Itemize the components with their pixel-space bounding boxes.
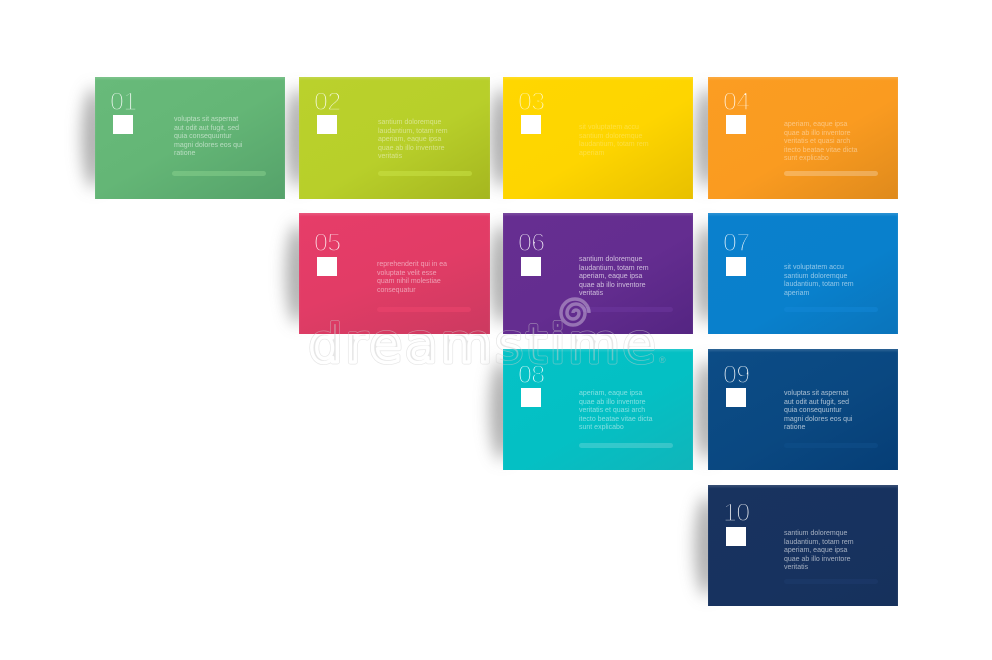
text block: quia consequuntur [174,133,232,140]
text block: quae ab illo inventore [784,130,851,137]
text block: laudantium, totam rem [784,281,854,288]
text block: quae ab illo inventore [579,282,646,289]
white square icon [726,388,746,407]
text block: voluptas sit aspernat [174,116,238,123]
text block: ratione [784,424,805,431]
text block: consequatur [377,287,416,294]
number 03: 03 [518,88,545,116]
white square icon [317,257,337,276]
text block [378,118,448,160]
progress bar [784,307,878,312]
watermark registered mark: ® [659,355,666,365]
progress bar [378,171,472,176]
progress bar [579,443,673,448]
white square icon [521,388,541,407]
text block: itecto beatae vitae dicta [579,416,653,423]
text block: santium doloremque [784,530,847,537]
text block [579,124,649,157]
text block [579,256,649,297]
number 07: 07 [723,229,750,257]
text block: aperiam, eaque ipsa [378,136,441,143]
number 05: 05 [314,229,341,257]
text block [174,116,242,157]
text block: aut odit aut fugit, sed [784,399,849,406]
text block: aperiam, eaque ipsa [784,547,847,554]
panel: card 08 teal [503,349,693,470]
watermark wordmark [310,320,655,365]
number 04: 04 [723,88,750,116]
text block: santium doloremque [378,119,441,126]
text block: laudantium, totam rem [378,128,448,135]
text block: santium doloremque [784,273,847,280]
text block: aperiam, eaque ipsa [579,390,642,397]
number 01: 01 [110,88,137,116]
progress bar [784,171,878,176]
panel: card 09 navy [708,349,898,470]
white square icon [317,115,337,134]
text block: laudantium, totam rem [579,141,649,148]
white square icon [726,527,746,546]
text block: quam nihil molestiae [377,278,441,285]
text block: sunt explicabo [579,424,624,431]
panel: card 05 pink [299,213,490,334]
text block: aperiam [579,150,604,157]
text block: aperiam, eaque ipsa [784,121,847,128]
progress bar [377,307,471,312]
text block: sit voluptatem accu [579,124,639,131]
text block: magni dolores eos qui [174,142,242,149]
white square icon [726,115,746,134]
number 06: 06 [518,229,545,257]
text block: veritatis et quasi arch [784,138,850,145]
text block: veritatis [784,564,808,571]
text block: veritatis [579,290,603,297]
text block: santium doloremque [579,256,642,263]
text block: itecto beatae vitae dicta [784,147,858,154]
number 09: 09 [723,361,750,389]
panel: card 04 orange [708,77,898,199]
number 10: 10 [723,499,750,527]
panel: card 01 green [95,77,285,199]
text block: quae ab illo inventore [378,145,445,152]
text block: sit voluptatem accu [784,264,844,271]
white square icon [113,115,133,134]
progress bar [784,443,878,448]
white square icon [726,257,746,276]
text block: veritatis [378,153,402,160]
panel: card 06 purple [503,213,693,334]
text block [579,390,653,431]
white square icon [521,257,541,276]
number 08: 08 [518,361,545,389]
progress bar [784,579,878,584]
panel: card 07 blue [708,213,898,334]
text block [784,120,858,162]
text block: laudantium, totam rem [579,265,649,272]
text block: laudantium, totam rem [784,539,854,546]
text block: voluptas sit aspernat [784,390,848,397]
text block: magni dolores eos qui [784,416,852,423]
text block: quia consequuntur [784,407,842,414]
text block [784,264,854,297]
panel: card 10 dark navy [708,485,898,606]
text block [377,260,447,294]
text block: aperiam, eaque ipsa [579,273,642,280]
watermark [310,297,666,365]
number 02: 02 [314,88,341,116]
white square icon [521,115,541,134]
infographic grid [72,77,898,606]
text block [784,390,852,431]
progress bar [172,171,266,176]
text block: ratione [174,150,195,157]
text block: aut odit aut fugit, sed [174,125,239,132]
text block: quae ab illo inventore [784,556,851,563]
progress bar [579,307,673,312]
text block [784,530,854,571]
watermark spiral [561,299,589,325]
text block: veritatis et quasi arch [579,407,645,414]
text block: aperiam [784,290,809,297]
text block: reprehenderit qui in ea [377,261,447,268]
text block: quae ab illo inventore [579,399,646,406]
panel: card 02 lime [299,77,490,199]
panel: card 03 yellow [503,77,693,199]
text block: voluptate velit esse [377,270,437,277]
text block: sunt explicabo [784,155,829,162]
text block: santium doloremque [579,133,642,140]
